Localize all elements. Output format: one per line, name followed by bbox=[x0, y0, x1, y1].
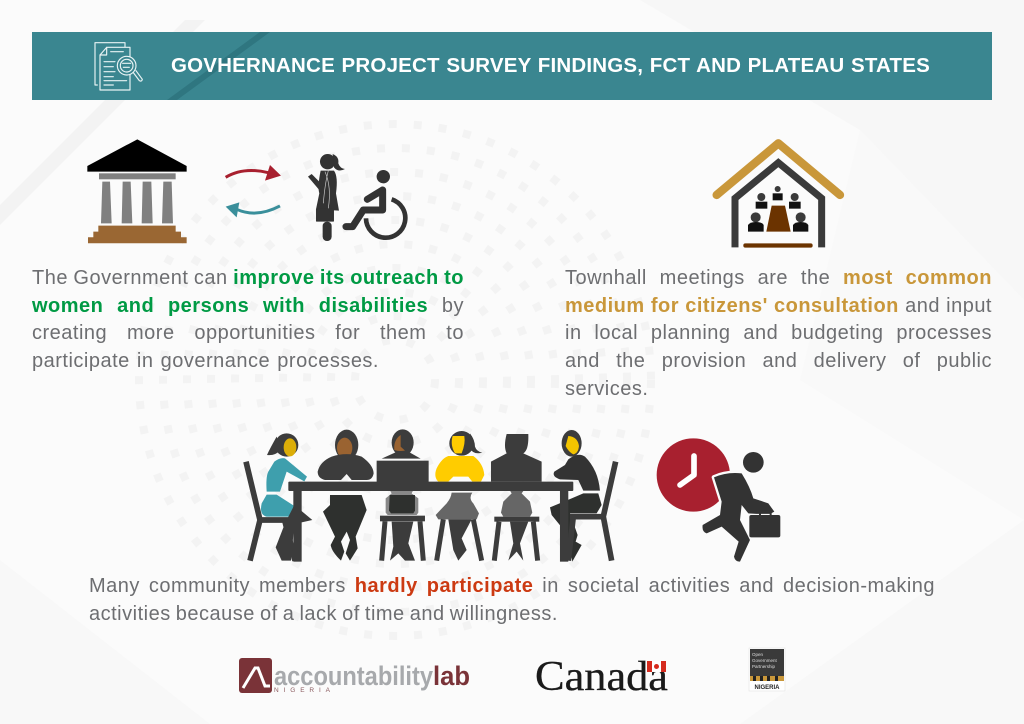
text block: outreach to women and persons with disabilities: participate in governance processes. bbox=[32, 350, 379, 372]
person 6 bbox=[550, 430, 602, 562]
table bbox=[288, 482, 573, 562]
icon: woman bbox=[308, 154, 345, 241]
logo: Open Government Partnership Nigeria bbox=[749, 648, 785, 691]
logo: Canada wordmark: Canada bbox=[535, 654, 668, 700]
text block: outreach to women and persons with disabilities: creating more opportunities for them to bbox=[32, 322, 464, 344]
text block: hardly participate: Many community members hardly participate in societal activities and decision-making bbox=[89, 575, 935, 597]
icon: clock and running man bbox=[657, 438, 780, 562]
logo: Open Government Partnership Nigeria: NIGERIA bbox=[754, 685, 780, 691]
logo: Accountability Lab Nigeria: lab bbox=[433, 661, 470, 691]
text block: townhall meetings: and the provision and delivery of public bbox=[565, 350, 992, 372]
text block: hardly participate: activities because of a lack of time and willingness. bbox=[89, 603, 558, 625]
arrow: government to people bbox=[226, 165, 281, 181]
text block: townhall meetings: medium for citizens' consultation and input bbox=[565, 295, 992, 317]
logo: Accountability Lab Nigeria bbox=[239, 658, 470, 694]
logo: Open Government Partnership Nigeria: Open bbox=[752, 652, 764, 657]
icon: townhall house bbox=[717, 143, 840, 248]
text block: outreach to women and persons with disabilities: women and persons with disabilities by bbox=[32, 295, 464, 317]
icon: document with magnifier bbox=[95, 43, 142, 90]
right chair bbox=[568, 462, 616, 561]
text block: hardly participate bbox=[89, 575, 935, 625]
icon: government building bbox=[87, 139, 187, 243]
title banner bbox=[32, 32, 992, 100]
person 5 back view bbox=[491, 434, 542, 561]
table with six people bbox=[246, 429, 616, 562]
text block: outreach to women and persons with disabilities: The Government can improve its outreach to bbox=[32, 267, 464, 289]
person 3 and chair bbox=[377, 429, 429, 561]
logo: Open Government Partnership Nigeria: Government bbox=[752, 658, 778, 663]
arrow: people to government bbox=[226, 202, 280, 217]
text block: outreach to women and persons with disabilities bbox=[32, 267, 464, 372]
person 4 yellow bbox=[435, 431, 484, 561]
text block: townhall meetings: services. bbox=[565, 378, 648, 400]
left chair bbox=[246, 462, 295, 561]
logo: Open Government Partnership Nigeria: Partnership bbox=[752, 664, 776, 669]
text block: townhall meetings: Townhall meetings are the most common bbox=[565, 267, 992, 289]
logo: Accountability Lab Nigeria: NIGERIA bbox=[274, 687, 331, 694]
text block: townhall meetings: in local planning and budgeting processes bbox=[565, 322, 992, 344]
text block: townhall meetings bbox=[565, 267, 992, 400]
logo: Accountability Lab Nigeria: accountability bbox=[274, 661, 433, 691]
heading: GOVHERNANCE PROJECT SURVEY FINDINGS, FCT AND PLATEAU STATES bbox=[171, 54, 930, 77]
icon: wheelchair user bbox=[346, 170, 405, 238]
person 1 teal bbox=[261, 433, 312, 561]
person 2 bbox=[318, 430, 374, 561]
banner shading bbox=[168, 32, 270, 100]
